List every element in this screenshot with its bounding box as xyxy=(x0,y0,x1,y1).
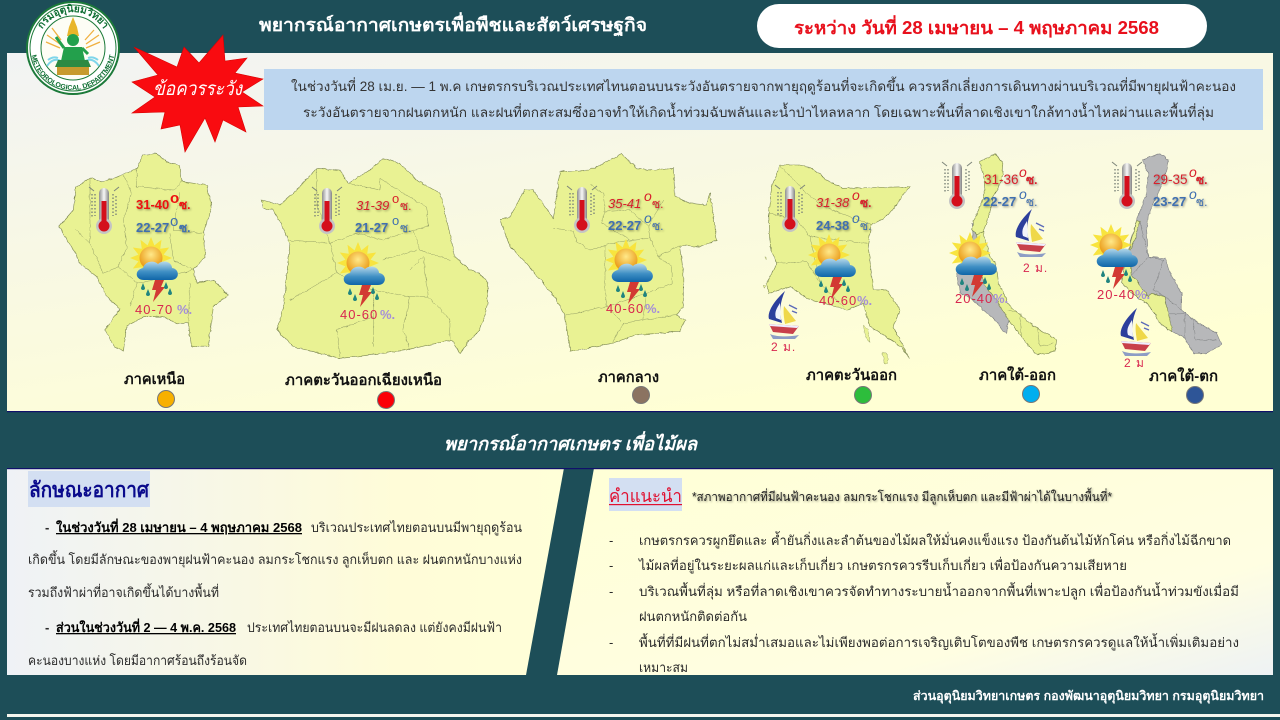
northeast data: o xyxy=(392,213,399,228)
east data: 2 ม. xyxy=(771,340,796,354)
south east coast data: 2 ม. xyxy=(1023,261,1048,275)
northeast data: 21-27 xyxy=(355,220,388,235)
east data: 24-38 xyxy=(816,218,849,233)
logo: meteorological department xyxy=(26,1,120,95)
panel: recommendations: บริเวณพื้นที่ลุ่ม หรือที่ลาดเชิงเขาควรจัดทำทางระบายน้ำออกจากพื้นที่เพาะปลูก เพื่อป้องกันน้ำท่วมขังเมื่อมี xyxy=(639,582,1239,600)
south west coast data: 20-40 xyxy=(1097,287,1135,302)
date range pill xyxy=(757,4,1207,48)
south west coast data: o xyxy=(1189,186,1197,202)
region label: northeast: ภาคตะวันออกเฉียงเหนือ xyxy=(285,372,442,389)
central data: %. xyxy=(645,301,660,316)
east data xyxy=(769,185,872,354)
panel: regional forecast xyxy=(7,53,1273,412)
warning starburst xyxy=(132,35,263,152)
north data: %. xyxy=(177,302,192,317)
region label: northeast xyxy=(285,372,442,408)
east data: o xyxy=(852,187,860,203)
northeast data: %. xyxy=(380,307,395,322)
panel: recommendations: เหมาะสม xyxy=(639,660,688,675)
central data xyxy=(567,186,663,316)
region label: south west coast xyxy=(1149,367,1218,404)
northeast data xyxy=(312,187,411,322)
central data: o xyxy=(644,188,652,204)
map: south west coast xyxy=(1121,153,1222,353)
south west coast data: 23-27 xyxy=(1153,194,1186,209)
central data: ซ. xyxy=(652,197,663,211)
region label: east: ภาคตะวันออก xyxy=(806,367,897,384)
south east coast data xyxy=(942,162,1048,306)
panel: weather characteristics: ส่วนในช่วงวันที่ 2 — 4 พ.ค. 2568 xyxy=(56,618,236,635)
map: south east coast xyxy=(957,154,1057,355)
north data: o xyxy=(170,213,178,230)
south west coast data xyxy=(1090,162,1207,370)
panel: weather characteristics: ในช่วงวันที่ 28 เมษายน – 4 พฤษภาคม 2568 xyxy=(56,518,302,535)
north data: 22-27 xyxy=(136,220,169,235)
region label: south west coast: ภาคใต้-ตก xyxy=(1149,367,1218,385)
east data: 31-38 xyxy=(816,195,850,210)
region label: north xyxy=(124,371,185,408)
panel: recommendations: - xyxy=(609,584,613,599)
south west coast data: ซ. xyxy=(1196,173,1207,187)
heading: weather characteristics xyxy=(28,471,150,507)
panel: weather characteristics: - xyxy=(45,520,49,535)
panel: weather characteristics: บริเวณประเทศไทยตอนบนมีพายุฤดูร้อน xyxy=(311,520,522,536)
northeast data: ซ. xyxy=(400,221,411,235)
region label: central xyxy=(598,369,659,404)
panel: recommendations: *สภาพอากาศที่มีฝนฟ้าคะนอง ลมกระโชกแรง มีลูกเห็บตก และมีฟ้าผ่าได้ในบางพื้นที่* xyxy=(692,487,1112,505)
logo: meteorological department: METEOROLOGICAL DEPARTMENT xyxy=(32,54,114,90)
south west coast data: 29-35 xyxy=(1153,172,1188,187)
north data: ซ. xyxy=(179,221,190,235)
south west coast data: %. xyxy=(1135,287,1150,302)
region label: central: ภาคกลาง xyxy=(598,369,659,386)
panel: recommendations: เกษตรกรควรผูกยึดและ ค้ำยันกิ่งและลำต้นของไม้ผลให้มั่นคงแข็งแรง ป้องกันต้นไม้หักโค่น หรือกิ่งไม้ฉีกขาด xyxy=(639,531,1231,549)
panel: weather characteristics: - xyxy=(45,620,49,635)
map: north xyxy=(59,153,228,352)
northeast data: o xyxy=(392,191,399,206)
panel: weather characteristics: รวมถึงฟ้าผ่าที่อาจเกิดขึ้นได้บางพื้นที่ xyxy=(28,583,219,600)
central data: o xyxy=(644,210,652,226)
alert text box: ระวังอันตรายจากฝนตกหนัก และฝนที่ตกสะสมซึ่งอาจทำให้เกิดน้ำท่วมฉับพลันและน้ำป่าไหลหลาก โดยเฉพาะพื้นที่ลาดเชิงเขาใกล้ทางน้ำไหลผ่านและพื้นที่ลุ่ม xyxy=(303,102,1214,121)
panel: recommendations xyxy=(557,468,1273,675)
panel: weather characteristics: เกิดขึ้น โดยมีลักษณะของพายุฝนฟ้าคะนอง ลมกระโชกแรง ลูกเห็บตก และ ฝนตกหนักบางแห่ง xyxy=(28,550,522,568)
panel: recommendations: ฝนตกหนักติดต่อกัน xyxy=(639,609,747,624)
date range pill: ระหว่าง วันที่ 28 เมษายน – 4 พฤษภาคม 2568 xyxy=(794,15,1159,38)
north data xyxy=(89,187,192,317)
east data: 40-60 xyxy=(819,293,857,308)
region label: north: ภาคเหนือ xyxy=(124,371,185,388)
heading: weather characteristics: ลักษณะอากาศ xyxy=(29,479,150,502)
panel: weather characteristics xyxy=(7,468,564,675)
northeast data: 40-60 xyxy=(340,307,378,322)
panel: recommendations: พื้นที่ที่มีฝนที่ตกไม่สม่ำเสมอและไม่เพียงพอต่อการเจริญเติบโตของพืช เกษตรกรควรดูแลให้น้ำเพิ่มเติมอย่าง xyxy=(639,633,1239,651)
panel: recommendations: ไม้ผลที่อยู่ในระยะผลแก่และเก็บเกี่ยว เกษตรกรควรรีบเก็บเกี่ยว เพื่อป้องกันความเสียหาย xyxy=(638,556,1127,574)
map: northeast xyxy=(262,158,488,358)
central data: 22-27 xyxy=(608,218,641,233)
alert text box: ในช่วงวันที่ 28 เม.ย. — 1 พ.ค เกษตรกรบริเวณประเทศไทนตอนบนระวังอันตรายจากพายุฤดูร้อนที่จะเกิดขึ้น ควรหลีกเลี่ยงการเดินทางผ่านบริเวณที่มีพายุฝนฟ้าคะนอง xyxy=(291,76,1236,95)
logo: meteorological department: กรมอุตุนิยมวิทยา xyxy=(38,4,108,29)
south west coast data: o xyxy=(1189,164,1197,180)
south east coast data: o xyxy=(1019,186,1027,202)
map: central xyxy=(500,154,717,352)
region label: east xyxy=(806,367,897,404)
panel: weather characteristics: ประเทศไทยตอนบนจะมีฝนลดลง แต่ยังคงมีฝนฟ้า xyxy=(247,620,502,635)
north data: 31-40 xyxy=(136,197,169,212)
east data: ซ. xyxy=(860,196,871,210)
map: east xyxy=(763,165,910,364)
north data: 40-70 xyxy=(135,302,173,317)
northeast data: ซ. xyxy=(400,199,411,213)
north data: o xyxy=(170,190,179,207)
section heading: fruit trees: พยากรณ์อากาศเกษตร เพื่อไม้ผล xyxy=(444,431,698,454)
south east coast data: ซ. xyxy=(1026,173,1037,187)
south west coast data: 2 ม xyxy=(1124,356,1145,370)
header title: พยากรณ์อากาศเกษตรเพื่อพืชและสัตว์เศรษฐกิจ xyxy=(259,12,647,37)
central data: ซ. xyxy=(652,219,663,233)
south east coast data: %. xyxy=(993,291,1008,306)
warning starburst: ข้อควรระวัง xyxy=(153,79,244,100)
northeast data: 31-39 xyxy=(356,198,389,213)
south east coast data: o xyxy=(1019,164,1027,180)
panel: weather characteristics: คะนองบางแห่ง โดยมีอากาศร้อนถึงร้อนจัด xyxy=(28,653,247,668)
panel: recommendations: - xyxy=(609,533,613,548)
central data: 40-60 xyxy=(606,301,644,316)
south east coast data: 22-27 xyxy=(983,194,1016,209)
east data: ซ. xyxy=(860,219,871,233)
central data: 35-41 xyxy=(608,196,641,211)
heading: recommendations: คำแนะนำ xyxy=(609,486,682,506)
footer credit: ส่วนอุตุนิยมวิทยาเกษตร กองพัฒนาอุตุนิยมวิทยา กรมอุตุนิยมวิทยา xyxy=(913,689,1264,704)
region label: south east coast xyxy=(979,366,1056,402)
panel: recommendations: - xyxy=(609,558,613,573)
east data: o xyxy=(852,210,860,226)
north data: ซ. xyxy=(179,198,190,212)
region label: south east coast: ภาคใต้-ออก xyxy=(979,366,1056,384)
panel: recommendations: - xyxy=(609,635,613,650)
south west coast data: ซ. xyxy=(1196,195,1207,209)
south east coast data: ซ. xyxy=(1026,195,1037,209)
alert text box xyxy=(264,69,1263,130)
south east coast data: 20-40 xyxy=(955,291,993,306)
south east coast data: 31-36 xyxy=(984,172,1019,187)
heading: recommendations xyxy=(609,478,682,511)
east data: %. xyxy=(857,293,872,308)
